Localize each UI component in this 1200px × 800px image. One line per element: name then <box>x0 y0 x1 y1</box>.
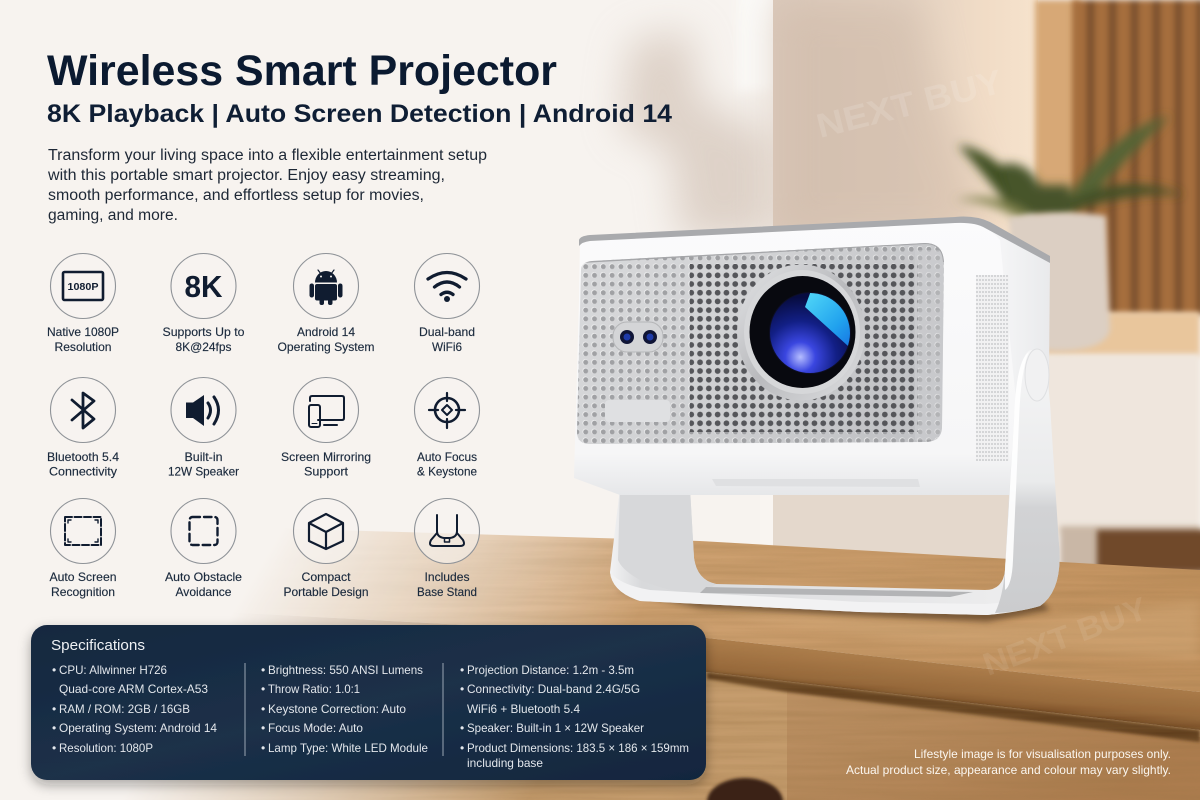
feature: base stand: Base Stand <box>417 585 477 599</box>
feature: Bluetooth <box>47 378 119 478</box>
icon: speaker <box>171 378 236 442</box>
feature: speaker <box>168 378 239 478</box>
specs column 1: Resolution: 1080P <box>59 741 153 755</box>
background: blurred potted plant <box>955 116 1185 351</box>
top grey rim <box>579 217 1050 263</box>
icon: wifi <box>414 254 480 318</box>
feature: Bluetooth: Bluetooth 5.4 <box>47 450 119 464</box>
specs column 1: RAM / ROM: 2GB / 16GB <box>59 702 190 716</box>
title: Wireless Smart Projector <box>47 47 557 95</box>
specs column 3: Connectivity: Dual-band 2.4G/5G <box>467 682 640 696</box>
disclaimer note: Actual product size, appearance and colour may vary slightly. <box>846 763 1171 777</box>
watermark: NEXT BUY <box>978 590 1152 683</box>
column divider <box>442 663 444 756</box>
specs column 2: Brightness: 550 ANSI Lumens <box>268 663 423 677</box>
specs column 2: • <box>261 663 265 677</box>
projector product <box>570 217 1060 622</box>
table highlight <box>824 602 1200 658</box>
speaker grille <box>570 240 950 450</box>
feature: 8K: Supports Up to <box>162 325 245 339</box>
feature: native 1080P: Native 1080P <box>47 325 119 339</box>
stand top rim <box>610 572 1036 615</box>
feature: native 1080P <box>47 254 119 354</box>
table lower body <box>152 672 1200 800</box>
specs column 1: • <box>52 702 56 716</box>
feature: auto screen: Auto Screen <box>50 570 116 584</box>
feature: mirroring <box>281 378 371 478</box>
icon: screen frame <box>50 498 116 564</box>
intro paragraph: smooth performance, and effortless setup for movies, <box>48 187 424 204</box>
projector body side <box>920 217 1050 495</box>
background: lower wall tone <box>773 400 1038 570</box>
background: bright window strip <box>738 0 772 90</box>
feature: WiFi: WiFi6 <box>432 340 462 354</box>
specs column 2 <box>261 663 428 755</box>
icon: android robot <box>294 254 358 318</box>
specs column 1: • <box>52 663 56 677</box>
intro paragraph: Transform your living space into a flexible entertainment setup <box>48 147 487 164</box>
icon: stand <box>414 498 480 564</box>
specs column 3: • <box>460 682 464 696</box>
feature: native 1080P: Resolution <box>54 340 112 354</box>
column divider <box>244 663 246 756</box>
arm inner highlight <box>1005 352 1029 590</box>
feature: speaker: Built-in <box>184 450 222 464</box>
intro paragraph: with this portable smart projector. Enjoy easy streaming, <box>47 167 445 184</box>
specifications heading: Specifications <box>51 638 145 654</box>
specs column 3: WiFi6 + Bluetooth 5.4 <box>467 702 580 716</box>
feature: 8K <box>162 254 245 354</box>
feature: 8K: 8K@24fps <box>176 340 232 354</box>
specs column 3: • <box>460 721 464 735</box>
specs column 2: • <box>261 721 265 735</box>
background: beige wall <box>773 0 1038 560</box>
specs column 3: Speaker: Built-in 1 × 12W Speaker <box>467 721 644 735</box>
icon: crosshair <box>414 378 480 442</box>
side vent <box>976 275 1009 461</box>
specs column 2: Keystone Correction: Auto <box>268 702 406 716</box>
subtitle: 8K Playback | Auto Screen Detection | Android 14 <box>47 100 672 128</box>
bottom vent <box>712 479 920 487</box>
table top <box>265 531 1200 692</box>
disclaimer note <box>846 747 1171 777</box>
specs column 3: including base <box>467 756 543 770</box>
icon: screen and phone <box>294 378 358 442</box>
specs column 3: Projection Distance: 1.2m - 3.5m <box>467 663 634 677</box>
icon: dashed square <box>171 498 236 564</box>
projector body front <box>574 217 1018 495</box>
panel: specifications <box>31 625 706 780</box>
feature: Android: Operating System <box>278 340 374 354</box>
feature: obstacle <box>165 498 242 599</box>
feature: mirroring: Support <box>304 464 349 478</box>
feature: compact: Compact <box>302 570 351 584</box>
feature: auto screen <box>50 498 116 599</box>
feature: auto focus <box>414 378 480 478</box>
specs column 1: CPU: Allwinner H726 <box>59 663 167 677</box>
background: tan wall column <box>1035 0 1080 320</box>
icon: bluetooth <box>50 378 116 442</box>
feature: base stand: Includes <box>424 570 470 584</box>
specs column 3: Product Dimensions: 183.5 × 186 × 159mm <box>467 741 689 755</box>
feature: obstacle: Avoidance <box>176 585 232 599</box>
plant leaves <box>955 116 1185 220</box>
icon: 8K: 8K <box>184 269 223 304</box>
feature: speaker: 12W Speaker <box>168 464 239 478</box>
specs column 1: • <box>52 741 56 755</box>
feature: auto focus: & Keystone <box>417 464 477 478</box>
specs column 3: • <box>460 663 464 677</box>
feature: WiFi <box>414 254 480 354</box>
specs column 1: Operating System: Android 14 <box>59 721 217 735</box>
specs column 1: Quad-core ARM Cortex-A53 <box>59 682 208 696</box>
specs column 2: • <box>261 741 265 755</box>
specs column 2: Lamp Type: White LED Module <box>268 741 428 755</box>
feature: compact: Portable Design <box>284 585 368 599</box>
background: wall shadow behind headline <box>620 30 772 240</box>
specs column 2: • <box>261 682 265 696</box>
specs column 2: • <box>261 702 265 716</box>
intro paragraph <box>47 147 487 224</box>
background: dark furniture block <box>1060 526 1200 574</box>
icon: box <box>294 498 358 564</box>
arm pivot <box>1025 349 1049 401</box>
stand <box>610 480 1060 615</box>
feature: mirroring: Screen Mirroring <box>281 450 371 464</box>
feature: Bluetooth: Connectivity <box>49 464 117 478</box>
background: diagonal shadow on wall <box>773 0 985 240</box>
feature: auto screen: Recognition <box>51 585 115 599</box>
table front edge <box>248 614 1200 730</box>
background: sideboard top <box>1040 312 1200 357</box>
disclaimer note: Lifestyle image is for visualisation purposes only. <box>914 747 1171 761</box>
table drawer front <box>787 688 1200 800</box>
stand shadow <box>615 590 1050 622</box>
sensors <box>613 322 663 352</box>
stand slot <box>700 587 973 597</box>
plant pot <box>1009 212 1110 351</box>
feature: Android <box>278 254 374 354</box>
specs column 2: Focus Mode: Auto <box>268 721 363 735</box>
table shadow line <box>707 672 1200 742</box>
specs column 3: • <box>460 741 464 755</box>
stand upper face <box>618 488 716 596</box>
background: wooden slat wall <box>1072 0 1200 315</box>
specs column 2: Throw Ratio: 1.0:1 <box>268 682 360 696</box>
specs column 3 <box>460 663 689 770</box>
feature: Android: Android 14 <box>297 325 355 339</box>
feature: base stand <box>414 498 480 599</box>
feature: WiFi: Dual-band <box>419 325 475 339</box>
icon: 1080P screen: 1080P <box>68 281 98 293</box>
background: white counter <box>1040 354 1200 534</box>
background: warm lower window area <box>760 234 774 544</box>
intro paragraph: gaming, and more. <box>48 207 178 224</box>
feature: compact <box>284 498 368 599</box>
specs column 1: • <box>52 721 56 735</box>
lens <box>737 264 865 400</box>
watermark: NEXT BUY <box>813 63 1007 146</box>
table grain <box>498 542 1200 800</box>
feature: auto focus: Auto Focus <box>417 450 477 464</box>
stand arm <box>995 350 1060 613</box>
specs column 1 <box>52 663 217 755</box>
table cut-out <box>707 778 783 800</box>
background: wooden table <box>146 531 1200 800</box>
feature: obstacle: Auto Obstacle <box>165 570 242 584</box>
